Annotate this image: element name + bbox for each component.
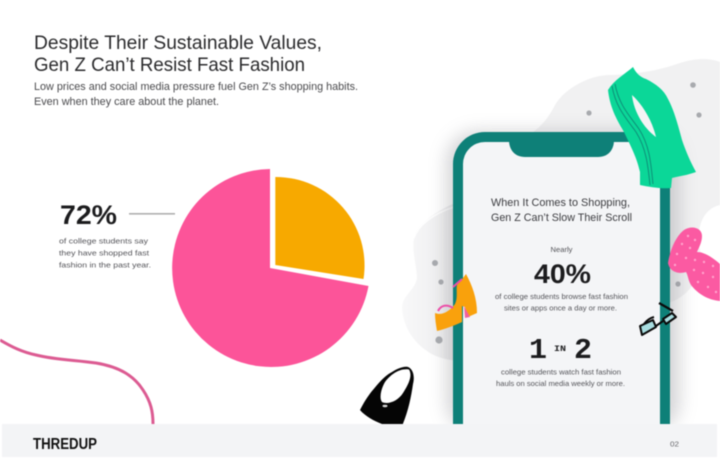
stat: nearly 40%: 40% [534, 259, 591, 289]
phone [453, 132, 670, 424]
phone heading [491, 197, 632, 224]
page number: 02 [670, 440, 679, 448]
stat: 1 in 2: IN [554, 345, 566, 354]
bag clasp [382, 405, 388, 407]
background blob: top right [500, 59, 720, 305]
phone frame [453, 132, 670, 424]
phone shadow [447, 132, 679, 432]
stat: nearly 40%: sites or apps once a day or more. [504, 304, 617, 312]
stat: nearly 40%: Nearly [551, 245, 573, 254]
stat: 1 in 2: 2 [574, 334, 592, 367]
title [34, 32, 322, 76]
gray dots [432, 82, 702, 344]
title: Gen Z Can’t Resist Fast Fashion [34, 54, 305, 76]
stat: 72%: they have shopped fast [59, 248, 149, 258]
stat: 1 in 2: 1 [529, 334, 547, 367]
footer bar [2, 424, 717, 457]
background blob: left [402, 198, 470, 361]
phone screen [463, 142, 660, 424]
scarf stripes [612, 84, 653, 185]
pie slice: 28% orange [275, 177, 365, 279]
stat: 1 in 2 [496, 334, 625, 388]
stat: 72% [59, 200, 175, 270]
garment dots [674, 235, 717, 293]
stat: 1 in 2: college students watch fast fashion [501, 368, 621, 376]
stat: nearly 40%: of college students browse fast fashion [495, 292, 628, 301]
logo: THREDUP [33, 436, 97, 453]
pie chart [172, 169, 368, 367]
subtitle [34, 81, 358, 108]
stat: 72%: 72% [60, 200, 117, 230]
phone heading: Gen Z Can’t Slow Their Scroll [491, 212, 632, 224]
stat: nearly 40% [495, 245, 628, 312]
icon: green scarf [608, 67, 696, 188]
title: Despite Their Sustainable Values, [34, 32, 322, 54]
stat: 72%: fashion in the past year. [59, 260, 151, 270]
subtitle: Low prices and social media pressure fuel Gen Z’s shopping habits. [34, 81, 358, 93]
icon: pink polka-dot garment [668, 228, 720, 301]
stat: 72%: of college students say [59, 236, 148, 246]
pie slice: 72% pink [172, 169, 368, 367]
shoe pink details [438, 279, 462, 311]
icon: orange platform shoe [435, 274, 477, 331]
stat: 1 in 2: hauls on social media weekly or more. [496, 379, 625, 388]
scarf opening [632, 95, 656, 137]
icon: black handbag [360, 367, 414, 426]
subtitle: Even when they care about the planet. [34, 96, 219, 108]
pink decorative curve [0, 340, 153, 424]
phone heading: When It Comes to Shopping, [491, 197, 630, 209]
phone notch [509, 140, 614, 157]
icon: sunglasses [640, 303, 676, 335]
white outline curves [414, 207, 720, 258]
